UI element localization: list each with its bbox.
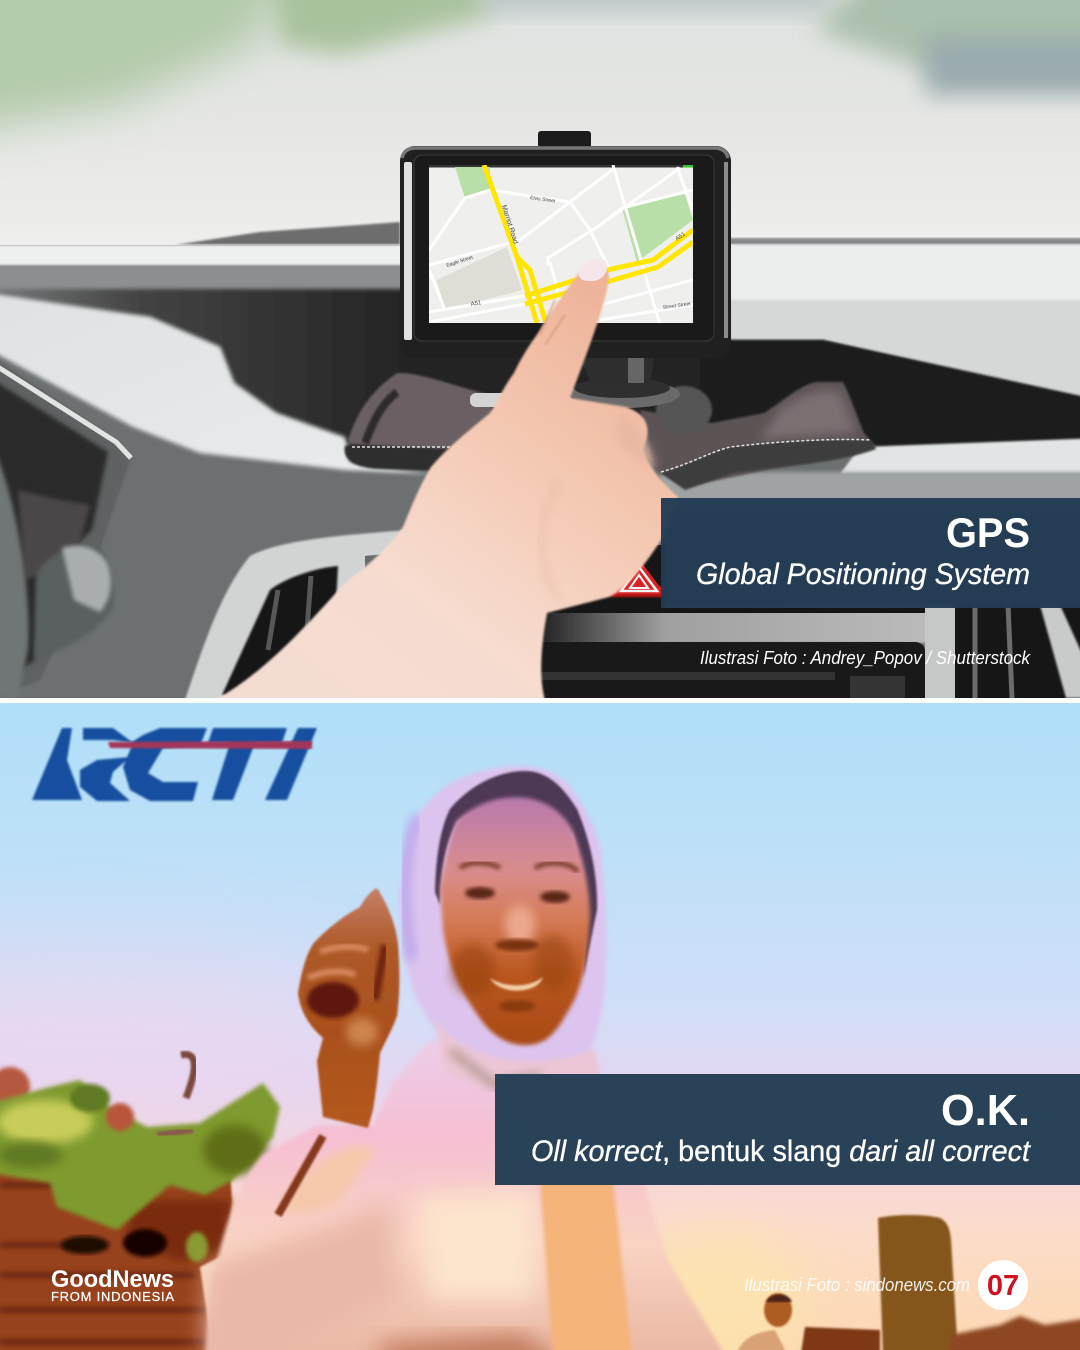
bottom photo: RCTI commercial still xyxy=(0,703,1080,1350)
steering wheel xyxy=(0,440,29,698)
fabric left lump xyxy=(348,372,492,448)
dress xyxy=(205,1040,725,1350)
top photo: GPS on car dashboard xyxy=(0,0,1080,710)
map screen: Marriot Road xyxy=(500,204,519,245)
dashboard xyxy=(0,222,1080,710)
text: O.K. definition: Oll korrect, bentuk slang dari all correct xyxy=(531,1135,1032,1168)
map screen: Street Street xyxy=(662,301,692,311)
headscarf xyxy=(400,766,606,1084)
dark recess xyxy=(0,289,420,445)
post and ground xyxy=(735,1215,1080,1350)
map screen: A51 xyxy=(470,300,483,308)
panel: O.K. caption xyxy=(495,1074,1080,1185)
leaves xyxy=(0,1080,280,1230)
ball joint and neck xyxy=(655,385,713,423)
right dark recess xyxy=(700,338,1080,448)
photo credit top: Ilustrasi Foto : Andrey_Popov / Shutterstock xyxy=(700,648,1031,668)
fingernail xyxy=(579,258,607,281)
map screen xyxy=(429,165,693,325)
clip button xyxy=(538,131,591,146)
instrument cluster xyxy=(0,355,131,700)
top light band xyxy=(0,245,1080,267)
distant figure xyxy=(735,1330,790,1350)
right light dash xyxy=(730,300,1080,405)
photo credit bottom: Ilustrasi Foto : sindonews.com xyxy=(744,1275,970,1295)
panel: GPS caption xyxy=(661,498,1080,608)
page number badge xyxy=(978,1260,1028,1310)
page number badge: 07 xyxy=(987,1270,1019,1302)
hair xyxy=(435,771,597,978)
woman figure xyxy=(205,766,725,1350)
heading: GPS: GPS xyxy=(946,509,1030,556)
light padded dash xyxy=(0,292,431,474)
text: Global Positioning System: Global Positioning System xyxy=(696,558,1030,591)
fabric right lump xyxy=(640,382,876,487)
stitched rim xyxy=(345,444,470,471)
map screen: A51 xyxy=(675,231,687,243)
brand logo: GoodNews from Indonesia: GoodNews xyxy=(51,1266,174,1293)
map screen: Eagle Street xyxy=(446,255,474,269)
RCTI logo xyxy=(32,728,317,801)
sky gradient xyxy=(0,703,1080,1350)
hanging orange scarf xyxy=(540,1180,632,1350)
hand pointing at screen xyxy=(215,258,678,700)
blurred road background xyxy=(0,0,1080,260)
crate and plants xyxy=(0,1054,280,1350)
divider gap xyxy=(0,698,1080,703)
device body xyxy=(400,146,731,358)
face xyxy=(440,797,590,1045)
map screen: Elvis Street xyxy=(530,195,556,205)
red fruits xyxy=(0,1067,30,1107)
heading: O.K.: O.K. xyxy=(941,1086,1030,1135)
stalk xyxy=(34,546,114,660)
hazard button xyxy=(564,545,661,608)
GPS device xyxy=(400,131,731,358)
centre console xyxy=(540,605,1080,700)
brand logo: GoodNews from Indonesia: FROM INDONESIA xyxy=(51,1289,174,1304)
phone mount base xyxy=(345,350,876,490)
raised fist xyxy=(298,888,399,1128)
air vent left xyxy=(185,530,420,700)
